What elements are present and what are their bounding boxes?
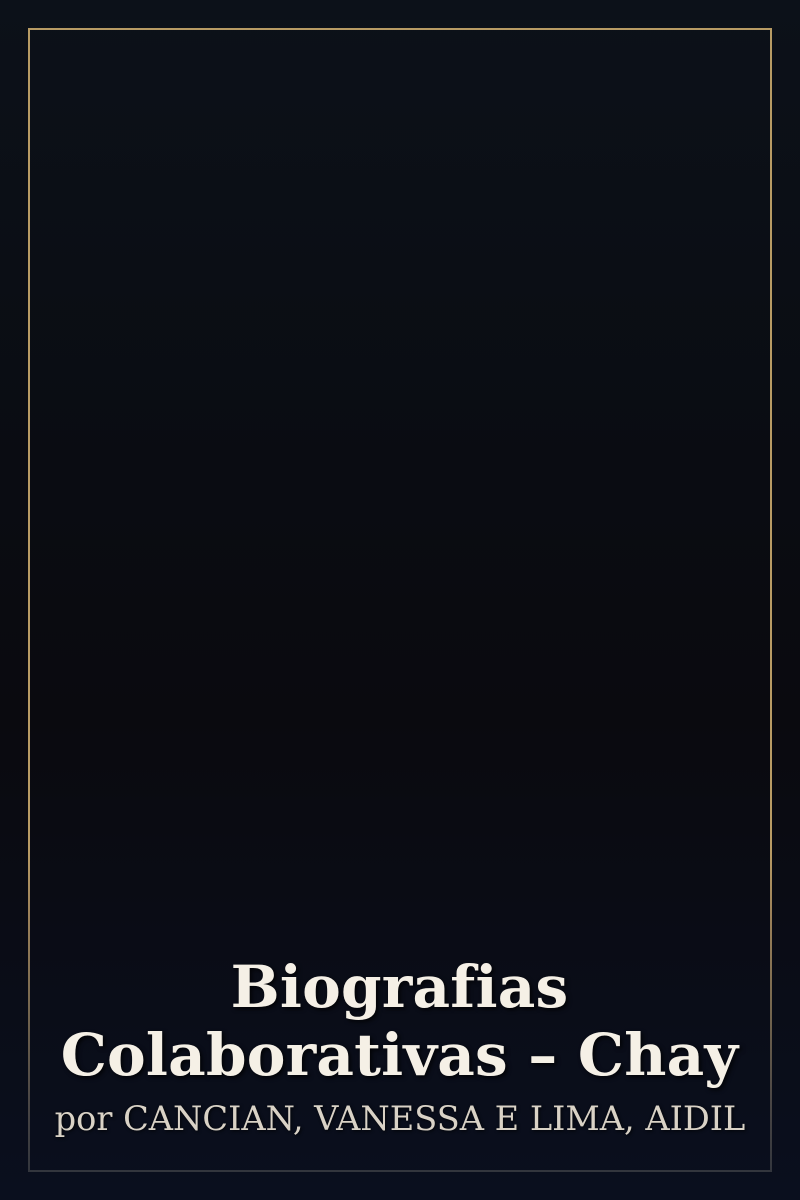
author byline: por CANCIAN, VANESSA E LIMA, AIDIL	[55, 1099, 745, 1138]
title: Colaborativas – Chay	[61, 1021, 738, 1089]
title: Biografias	[231, 953, 568, 1021]
title	[61, 953, 740, 1090]
title and author block	[55, 953, 746, 1138]
